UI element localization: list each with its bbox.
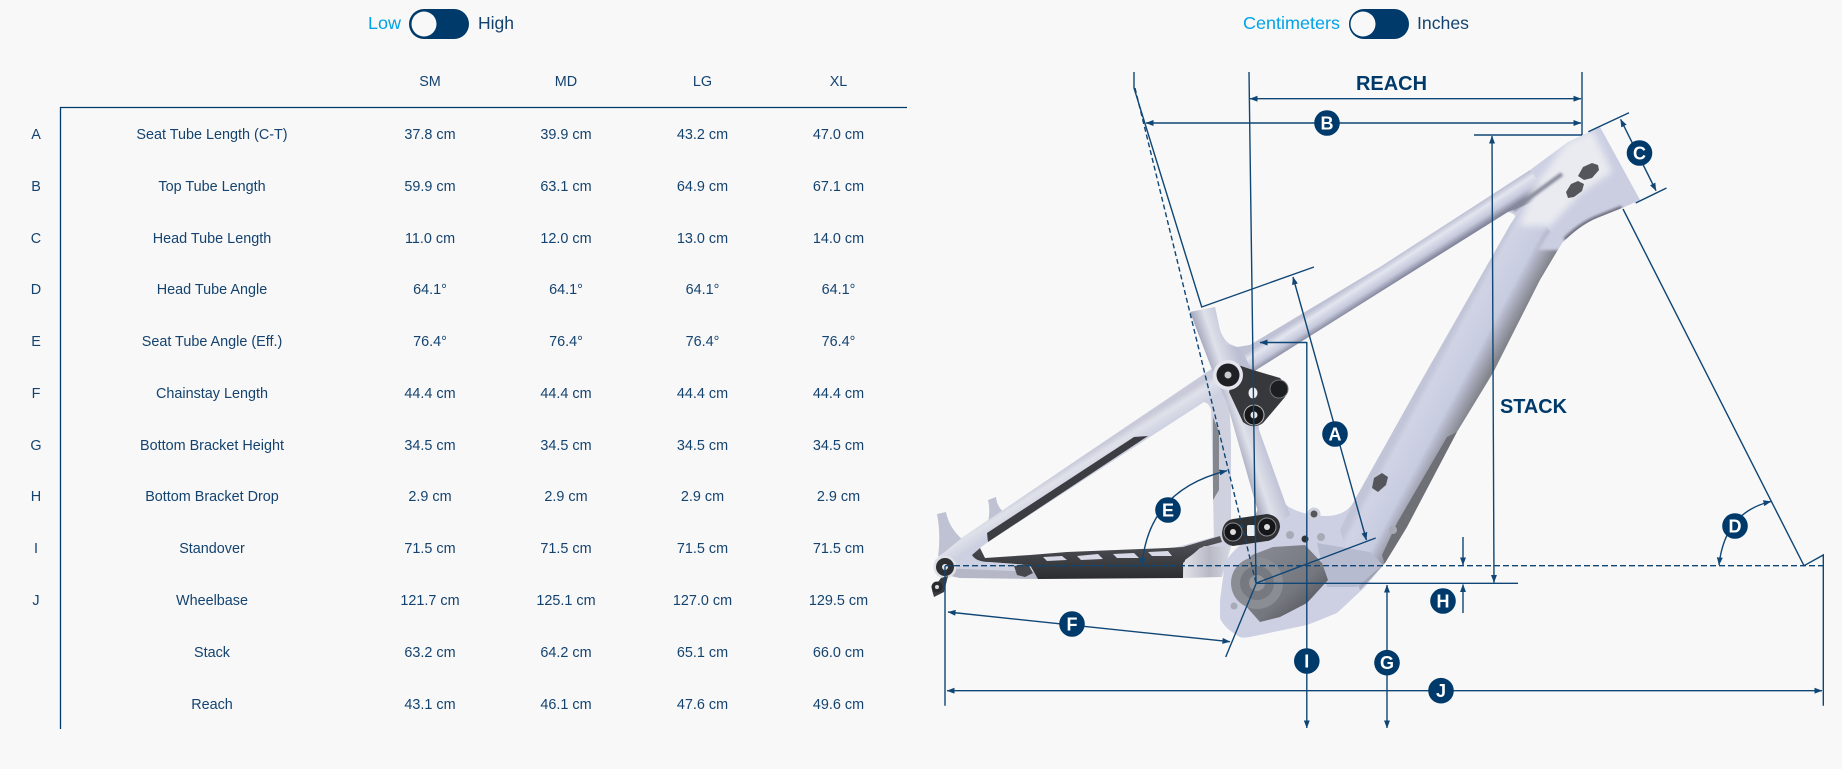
geometry table — [30, 74, 907, 729]
table header sizes: LG — [693, 74, 712, 90]
row: bottom bracket drop: 2.9 cm — [408, 489, 452, 505]
row: stack: 64.2 cm — [540, 645, 592, 661]
head tube highlight — [1520, 130, 1612, 226]
reach label: REACH — [1356, 73, 1427, 95]
row: seat tube angle: 76.4° — [822, 334, 855, 350]
row: stack: 63.2 cm — [404, 645, 456, 661]
row: seat tube length: 43.2 cm — [677, 127, 728, 143]
row: reach: Reach — [191, 697, 233, 713]
down tube dark band — [1382, 432, 1457, 565]
row: seat tube angle: E — [31, 334, 41, 350]
badge H — [1430, 588, 1456, 614]
table header sizes: SM — [419, 74, 441, 90]
toggle: low / high: Low — [368, 13, 401, 33]
row: seat tube length: Seat Tube Length (C-T) — [136, 127, 288, 143]
badge I: I — [1304, 652, 1309, 672]
chainguard — [972, 536, 1222, 579]
badge J: J — [1436, 681, 1446, 701]
row: head tube angle: 64.1° — [549, 282, 583, 298]
BB facets — [1317, 543, 1383, 587]
row: seat tube angle: 76.4° — [549, 334, 583, 350]
row: head tube length: 14.0 cm — [813, 231, 864, 247]
row: bottom bracket drop: 2.9 cm — [544, 489, 588, 505]
row: head tube length: 13.0 cm — [677, 231, 728, 247]
strut shading — [1211, 398, 1231, 547]
head angle arc — [1719, 502, 1771, 565]
chainstay base shading — [937, 568, 1040, 579]
head tube lavender — [1539, 138, 1640, 252]
row: top tube length: 63.1 cm — [540, 179, 592, 195]
small bolts — [1230, 508, 1397, 610]
row: reach: 46.1 cm — [540, 697, 592, 713]
upper rocker — [1213, 360, 1288, 426]
row: head tube length: 11.0 cm — [405, 231, 455, 247]
row: bottom bracket drop: H — [31, 489, 41, 505]
row: seat tube angle: 76.4° — [413, 334, 447, 350]
badge B — [1314, 110, 1340, 136]
row: top tube length: 59.9 cm — [404, 179, 456, 195]
stack label: STACK — [1500, 396, 1568, 418]
row: seat tube length: 47.0 cm — [813, 127, 864, 143]
table header sizes: XL — [830, 74, 847, 90]
row: wheelbase: 121.7 cm — [400, 593, 460, 609]
stack dimension — [1474, 135, 1582, 582]
main frame — [1190, 127, 1640, 638]
row: seat tube angle — [31, 334, 855, 350]
lower link — [1222, 514, 1280, 546]
row: top tube length: B — [31, 179, 41, 195]
row: head tube length — [31, 231, 864, 247]
seat tube gradient — [1185, 300, 1290, 545]
chainguard windows — [1043, 551, 1172, 561]
row: chainstay length: Chainstay Length — [156, 386, 268, 402]
row: standover: 71.5 cm — [813, 541, 864, 557]
row: reach: 47.6 cm — [677, 697, 728, 713]
badge J — [1428, 678, 1454, 704]
row: chainstay length: F — [32, 386, 41, 402]
rear triangle — [935, 368, 1240, 578]
chainstay yoke — [1183, 546, 1231, 578]
gusset crease — [1513, 174, 1562, 210]
row: head tube length: Head Tube Length — [153, 231, 271, 247]
toggle: centimeters / inches: Centimeters — [1243, 13, 1340, 33]
badge I — [1294, 648, 1320, 674]
row: seat tube angle: Seat Tube Angle (Eff.) — [142, 334, 282, 350]
row: seat tube length: 37.8 cm — [404, 127, 456, 143]
row: top tube length: Top Tube Length — [158, 179, 266, 195]
BB height arrow — [1386, 585, 1388, 728]
cable ports — [1372, 163, 1599, 492]
row: seat tube length: 39.9 cm — [540, 127, 592, 143]
row: stack — [194, 645, 864, 661]
head tube axis — [1623, 209, 1823, 706]
row: standover: I — [34, 541, 38, 557]
row: wheelbase — [32, 593, 868, 609]
row: head tube angle: 64.1° — [686, 282, 719, 298]
BB drop arrows — [1462, 537, 1464, 613]
badge D — [1722, 513, 1748, 539]
row: wheelbase: 125.1 cm — [536, 593, 596, 609]
toggle: centimeters / inches — [1243, 9, 1469, 39]
badge A — [1322, 421, 1348, 447]
row: reach — [191, 697, 864, 713]
row: bottom bracket height: 34.5 cm — [540, 438, 592, 454]
bike frame illustration — [932, 120, 1650, 638]
row: reach: 49.6 cm — [813, 697, 864, 713]
standover vertical arrow — [1306, 342, 1308, 728]
row: chainstay length — [32, 386, 864, 402]
row: top tube length: 64.9 cm — [677, 179, 728, 195]
chainstay slot — [1014, 564, 1033, 577]
seat angle arc — [1142, 471, 1227, 566]
row: seat tube length: A — [31, 127, 41, 143]
row: chainstay length: 44.4 cm — [540, 386, 592, 402]
row: bottom bracket height: Bottom Bracket Height — [140, 438, 284, 454]
row: head tube angle — [31, 282, 855, 298]
row: top tube length — [31, 179, 864, 195]
row: bottom bracket height: G — [30, 438, 42, 454]
row: wheelbase: 129.5 cm — [809, 593, 868, 609]
row: seat tube length — [31, 127, 864, 143]
toggle: low / high: High — [478, 13, 514, 33]
dropout pivot — [934, 556, 956, 578]
row: stack: 66.0 cm — [813, 645, 864, 661]
row: stack: Stack — [194, 645, 231, 661]
row: standover: Standover — [179, 541, 245, 557]
motor cover — [1231, 557, 1283, 609]
badge A: A — [1328, 424, 1342, 444]
toggle: low / high — [368, 9, 514, 39]
strut dark inset — [1213, 417, 1219, 500]
badge D: D — [1728, 516, 1742, 536]
BB horizontal line — [1256, 582, 1518, 584]
badge C — [1627, 140, 1652, 166]
badge H: H — [1436, 592, 1450, 612]
row: standover: 71.5 cm — [404, 541, 456, 557]
top tube arrow — [1146, 122, 1581, 124]
row: chainstay length: 44.4 cm — [813, 386, 864, 402]
row: bottom bracket height: 34.5 cm — [813, 438, 864, 454]
down tube gradient — [1340, 205, 1562, 590]
row: bottom bracket drop: 2.9 cm — [817, 489, 860, 505]
top tube gradient — [1240, 170, 1550, 372]
toggle: centimeters / inches: Inches — [1417, 13, 1469, 33]
row: wheelbase: J — [32, 593, 40, 609]
table header sizes — [419, 74, 847, 90]
seatstay dark band — [987, 436, 1148, 542]
reach dimension — [1249, 72, 1582, 583]
badge B: B — [1320, 114, 1334, 134]
chainstay arrow — [948, 612, 1230, 642]
row: stack: 65.1 cm — [677, 645, 728, 661]
frame shading — [1185, 120, 1650, 590]
badge G: G — [1380, 653, 1394, 673]
badge E: E — [1162, 500, 1174, 520]
standover line — [1260, 341, 1307, 344]
row: head tube angle: 64.1° — [413, 282, 447, 298]
table header sizes: MD — [555, 74, 577, 90]
row: chainstay length: 44.4 cm — [404, 386, 456, 402]
rear dropout fins — [937, 497, 1007, 557]
row: top tube length: 67.1 cm — [813, 179, 864, 195]
row: bottom bracket drop: 2.9 cm — [681, 489, 724, 505]
row: reach: 43.1 cm — [404, 697, 456, 713]
row: bottom bracket drop — [31, 489, 860, 505]
dimension lines — [945, 72, 1823, 728]
head tube ticks and arrow — [1588, 113, 1666, 203]
badge F — [1059, 611, 1085, 637]
row: standover — [34, 541, 864, 557]
badge C: C — [1633, 144, 1646, 164]
BB construction lines — [1226, 538, 1376, 657]
row: wheelbase: Wheelbase — [176, 593, 248, 609]
badge F: F — [1066, 614, 1078, 634]
row: standover: 71.5 cm — [677, 541, 728, 557]
axle dashed line — [945, 565, 1823, 567]
arrow A — [1293, 277, 1366, 540]
badge E — [1155, 497, 1181, 523]
derailleur hanger — [932, 576, 948, 597]
row: seat tube angle: 76.4° — [686, 334, 719, 350]
badge G — [1374, 650, 1400, 676]
row: head tube angle: Head Tube Angle — [157, 282, 267, 298]
row: wheelbase: 127.0 cm — [673, 593, 732, 609]
row: head tube angle: D — [31, 282, 41, 298]
row: bottom bracket height: 34.5 cm — [404, 438, 456, 454]
seat tube dashed axis — [1135, 88, 1256, 583]
row: head tube angle: 64.1° — [822, 282, 855, 298]
row: head tube length: 12.0 cm — [540, 231, 592, 247]
row: head tube length: C — [31, 231, 41, 247]
row: bottom bracket drop: Bottom Bracket Drop — [145, 489, 279, 505]
motor — [1237, 545, 1328, 622]
seat tube extension lines — [1134, 72, 1314, 307]
row: bottom bracket height: 34.5 cm — [677, 438, 728, 454]
row: standover: 71.5 cm — [540, 541, 592, 557]
wheelbase — [945, 566, 1822, 706]
head tube underside shadow — [1565, 208, 1622, 240]
row: chainstay length: 44.4 cm — [677, 386, 728, 402]
row: bottom bracket height — [30, 438, 864, 454]
